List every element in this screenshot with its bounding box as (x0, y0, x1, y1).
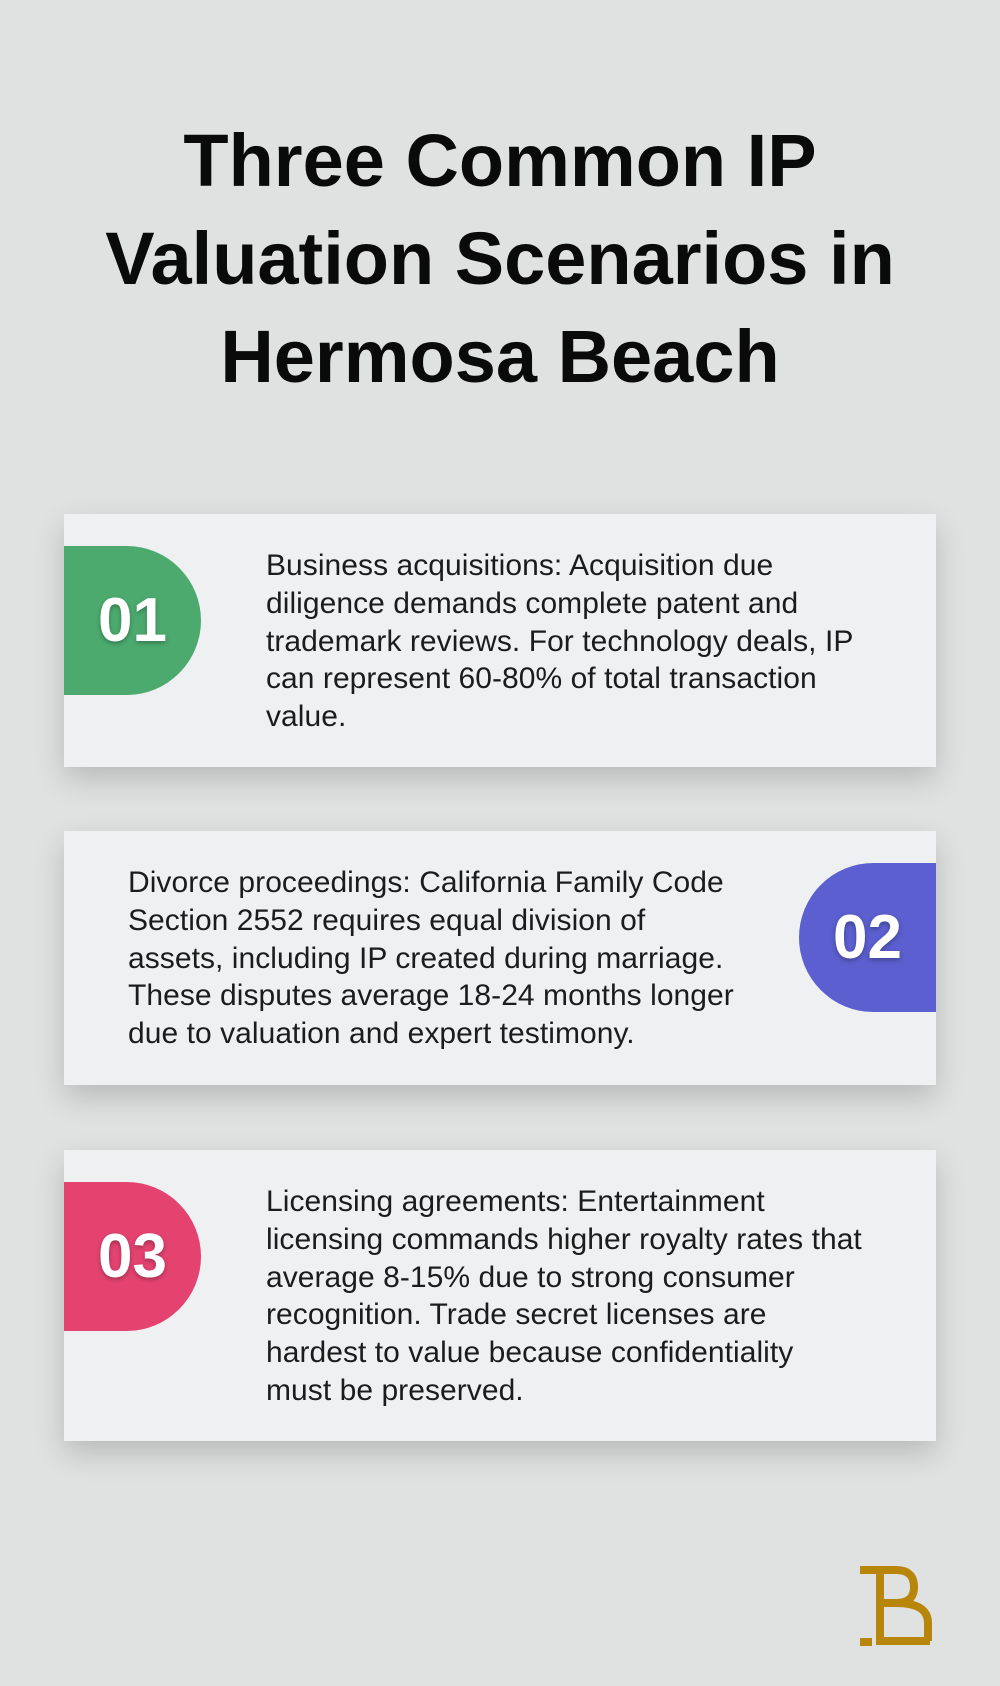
text: divorce proceedings (128, 866, 734, 1050)
text: licensing agreements: hardest to value because confidentiality (266, 1336, 793, 1369)
text: licensing agreements: Licensing agreements: Entertainment (266, 1185, 765, 1218)
text: licensing agreements (266, 1185, 862, 1407)
panel: card 03 (64, 1150, 936, 1441)
panel: card 01 (64, 514, 936, 767)
text: business acquisitions: Business acquisitions: Acquisition due (266, 549, 773, 582)
text: business acquisitions: value. (266, 700, 346, 733)
text: business acquisitions: trademark reviews. For technology deals, IP (266, 625, 853, 658)
text: licensing agreements: recognition. Trade secret licenses are (266, 1298, 766, 1331)
text: business acquisitions: diligence demands complete patent and (266, 587, 798, 620)
text: licensing agreements: must be preserved. (266, 1374, 524, 1407)
title: Three Common IP (183, 119, 817, 202)
text: divorce proceedings: Section 2552 requires equal division of (128, 904, 645, 937)
text: divorce proceedings: assets, including IP created during marriage. (128, 942, 723, 975)
badge 01 (64, 546, 201, 695)
badge 03 (64, 1182, 201, 1331)
text: licensing agreements: average 8-15% due to strong consumer (266, 1261, 795, 1294)
title: Hermosa Beach (220, 315, 780, 398)
text: divorce proceedings: due to valuation and expert testimony. (128, 1017, 635, 1050)
text: business acquisitions: can represent 60-80% of total transaction (266, 662, 817, 695)
title (105, 119, 895, 398)
logo (860, 1566, 932, 1646)
text: licensing agreements: licensing commands higher royalty rates that (266, 1223, 862, 1256)
badge 02: 02 (833, 903, 902, 972)
panel: card 02 (64, 831, 936, 1085)
badge 02 (799, 863, 936, 1012)
text: divorce proceedings: These disputes average 18-24 months longer (128, 979, 734, 1012)
badge 01: 01 (98, 586, 167, 655)
badge 03: 03 (98, 1222, 167, 1291)
title: Valuation Scenarios in (105, 217, 895, 300)
text: business acquisitions (266, 549, 853, 733)
text: divorce proceedings: Divorce proceedings: California Family Code (128, 866, 724, 899)
